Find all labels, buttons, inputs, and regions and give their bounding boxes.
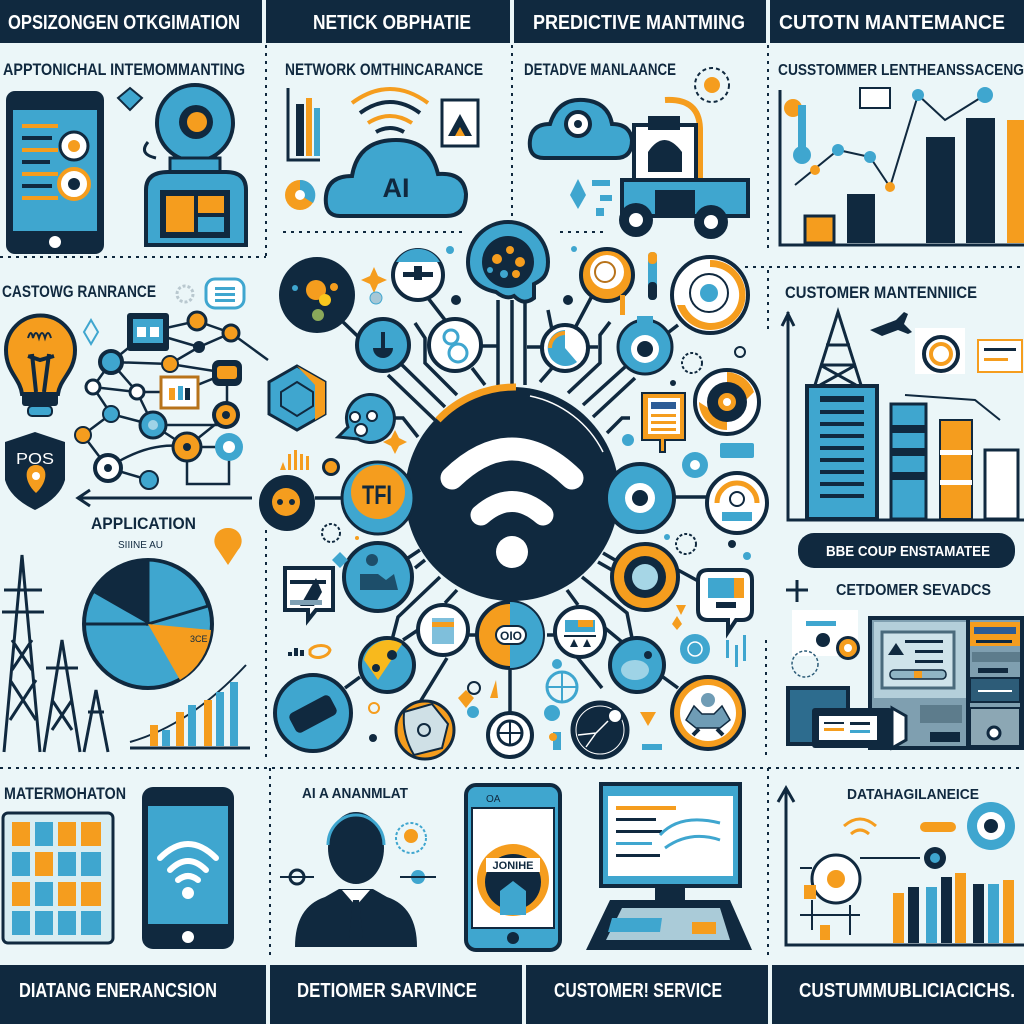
node: tablet circle [275,675,351,751]
chart: tower server bars [782,312,1024,520]
icon: light bulb [6,316,75,416]
node: hexagon [269,366,325,430]
chart: small bars [288,88,320,160]
label: sub heading: SIIINE AU [118,540,163,551]
banner: BBE COUP ENSTAMATEE [826,543,990,560]
node: ring target [672,257,748,333]
node: dark cluster [279,257,355,333]
icon: faint gear [177,286,193,302]
panel: predictive maintenance [524,60,748,239]
icon: target [695,68,729,102]
icon: small diamond [118,88,142,110]
node: TFI: TFI [362,480,392,510]
node: gear right [606,464,674,532]
icon: person silhouette [295,812,417,947]
node: orange dial [695,370,759,434]
icon: color wheel [285,180,315,210]
bottom footer bar: DETIOMER SARVINCE [297,980,477,1002]
node: blue knot [429,319,481,371]
icon: plus [786,580,808,602]
node: orange coil [581,249,633,315]
arrow: left pointing [78,490,252,506]
node: key person [707,473,767,533]
heading: MATERMOHATON [4,784,126,803]
icon: node left [280,870,314,884]
node: brain head [468,222,548,302]
heading: application: APPLICATION [91,514,196,533]
node: yellow swirl [360,638,414,692]
top header bar [0,0,1024,43]
icon: app phone [466,785,560,950]
central hub diagram [259,222,767,759]
heading: maintenance: CUSTOMER MANTENNIICE [785,283,977,302]
icon: robot cart [619,100,748,239]
node: OIO half disc: OIO [500,629,522,643]
panel: customer services [786,533,1022,748]
panel: data chart bottom right [778,786,1024,945]
node: gear blue [618,316,672,374]
icon: plane [870,312,912,336]
node: network top [393,249,443,300]
icon: AI cloud [326,140,466,216]
panel: bulb and node network [2,279,268,510]
heading: network: NETWORK OMTHINCARANCE [285,60,483,79]
panel: bottom left calculator and phone [3,784,234,949]
icon: cards drive [788,688,906,748]
node: speech monitor [698,570,752,632]
top header bar: NETICK OBPHATIE [313,12,471,34]
icon: tag mountain [442,100,478,146]
diagram: node network [75,312,268,489]
node: brain small [488,713,532,757]
icon: desktop computer [586,784,752,950]
heading: application: APPTONICHAL INTEMOMMANTING [3,60,245,79]
icon: computer [870,618,1022,748]
heading: AI A ANANMLAT [302,785,408,802]
icon: app phone: JONIHE [493,860,533,872]
panel: customer bar chart [778,62,1024,245]
icon: wifi phone [142,787,234,949]
node: hub gauge [542,325,588,371]
banner [798,533,1015,568]
node: document [642,393,685,452]
bottom footer bar: DIATANG ENERANCSION [19,980,217,1002]
node: TFI [342,462,414,534]
heading: casting: CASTOWG RANRANCE [2,282,156,301]
icon: POS shield [5,432,65,510]
node: OIO half disc [477,602,543,668]
icon: node right [400,870,436,884]
icon: transmission towers [2,555,108,752]
icon: signal arcs [352,89,428,132]
top header bar: OPSIZONGEN OTKGIMATION [8,12,240,34]
icon: AI cloud: AI [382,173,410,203]
chart: pie [84,560,212,688]
icon: robot agent [144,85,246,245]
icon: doc cards [978,340,1022,372]
node: team ring [670,675,746,751]
icon: chat badge [206,279,244,308]
icon: keypad [3,813,113,943]
icon: head badge [396,823,426,853]
panel: network [285,60,483,216]
icon: location pin [214,528,242,565]
connector lines [315,296,707,712]
icon: cloud with lens [530,100,632,158]
hub: wifi circle [405,387,619,601]
icon: small rockets [570,179,612,216]
small accents [280,246,754,750]
node: orange gear [612,544,678,610]
chart: rising bars and line [780,87,1024,245]
panel: application tablet and robot [3,60,246,254]
panel: AI analyst [280,785,436,947]
node: blue bubble [610,638,664,692]
chart: bars and network [778,788,1024,945]
node: small chart [418,605,468,655]
node: dark crack [572,702,628,758]
heading: predictive: DETADVE MANLAANCE [524,60,676,79]
spoke nodes [259,222,767,759]
chart: pie: 3CE [190,634,208,644]
top header bar: CUTOTN MANTEMANCE [779,12,1005,34]
icon: tablet [6,91,104,254]
icon: ring target [915,328,965,374]
node: face left [259,475,315,531]
node: blue eye [357,319,409,371]
bottom footer bar [0,965,1024,1024]
icon: app phone: OA [486,794,501,805]
node: document bubble [285,568,333,620]
node: orange wrapped [396,701,454,759]
chart: rising bars [130,665,250,748]
icon: sketch card [792,610,860,677]
node: blue puzzle [344,543,412,611]
icon: pen nib [84,320,98,344]
heading: services: CETDOMER SEVADCS [836,582,991,599]
panel: application pie and towers [2,514,250,752]
node: printer [555,607,605,657]
top header bar: PREDICTIVE MANTMING [533,12,745,34]
heading: DATAHAGILANEICE [847,786,979,803]
bottom footer bar: CUSTOMER! SERVICE [554,980,722,1002]
node: chat circles [338,394,394,442]
panel: customer maintenance towers [782,283,1024,520]
icon: POS shield: POS [16,451,54,468]
